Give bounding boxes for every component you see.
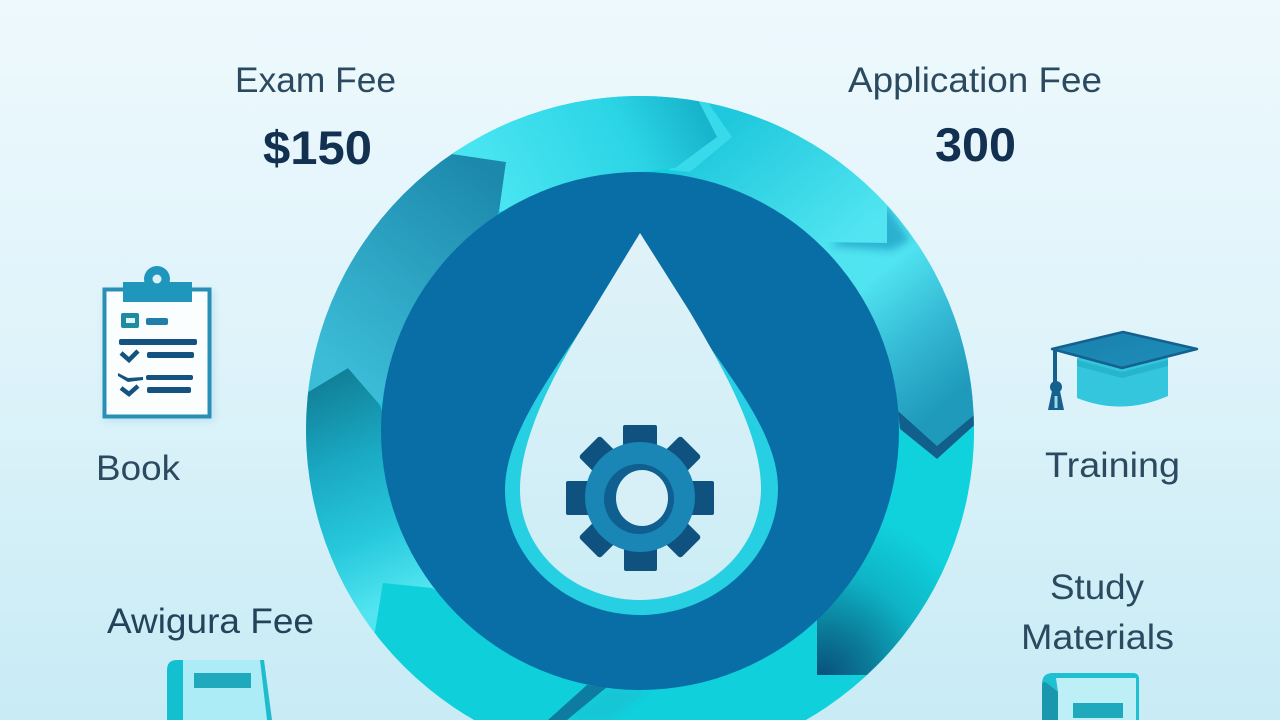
water drop xyxy=(520,233,761,600)
arrow segment: right xyxy=(817,200,980,446)
label: study materials: Study xyxy=(1050,568,1145,607)
dark arrow divider xyxy=(548,685,607,720)
icon: gear xyxy=(566,425,714,571)
label: training: Training xyxy=(1045,446,1180,485)
arrow segment: bottom right shade xyxy=(581,691,635,716)
icon: clipboard checklist xyxy=(104,266,214,421)
arrow segment: bottom right xyxy=(806,675,867,720)
icon: book right xyxy=(1042,673,1139,720)
circular diagram: arrow ring with water drop and gear xyxy=(300,90,980,720)
arrow segment: lower right xyxy=(817,426,974,675)
label: book: Book xyxy=(96,449,181,488)
icon: graduation cap xyxy=(1048,332,1197,410)
value: exam fee: $150 xyxy=(263,121,372,174)
label: application fee xyxy=(848,61,1102,171)
value: application fee: 300 xyxy=(935,118,1016,171)
label: exam fee xyxy=(235,61,396,174)
icon: book left xyxy=(167,660,272,720)
label: awigura fee: Awigura Fee xyxy=(107,602,314,641)
inner blue disc xyxy=(381,172,899,690)
arrow segment: left xyxy=(306,368,436,632)
label: study materials: Materials xyxy=(1021,618,1174,657)
arrow segment: bottom left xyxy=(375,583,474,720)
water drop outline xyxy=(505,312,778,615)
outer ring of arrows xyxy=(300,90,980,720)
label: application fee: Application Fee xyxy=(848,61,1102,100)
arrow segment: top xyxy=(452,90,717,212)
arrowhead highlight band xyxy=(668,97,732,172)
label: exam fee: Exam Fee xyxy=(235,61,396,100)
dark chevron band xyxy=(898,410,980,459)
arrow segment: top left xyxy=(300,154,506,405)
arrow segment: top right xyxy=(675,96,887,243)
arrowhead shadow xyxy=(830,205,910,250)
label: study materials xyxy=(1021,568,1174,657)
